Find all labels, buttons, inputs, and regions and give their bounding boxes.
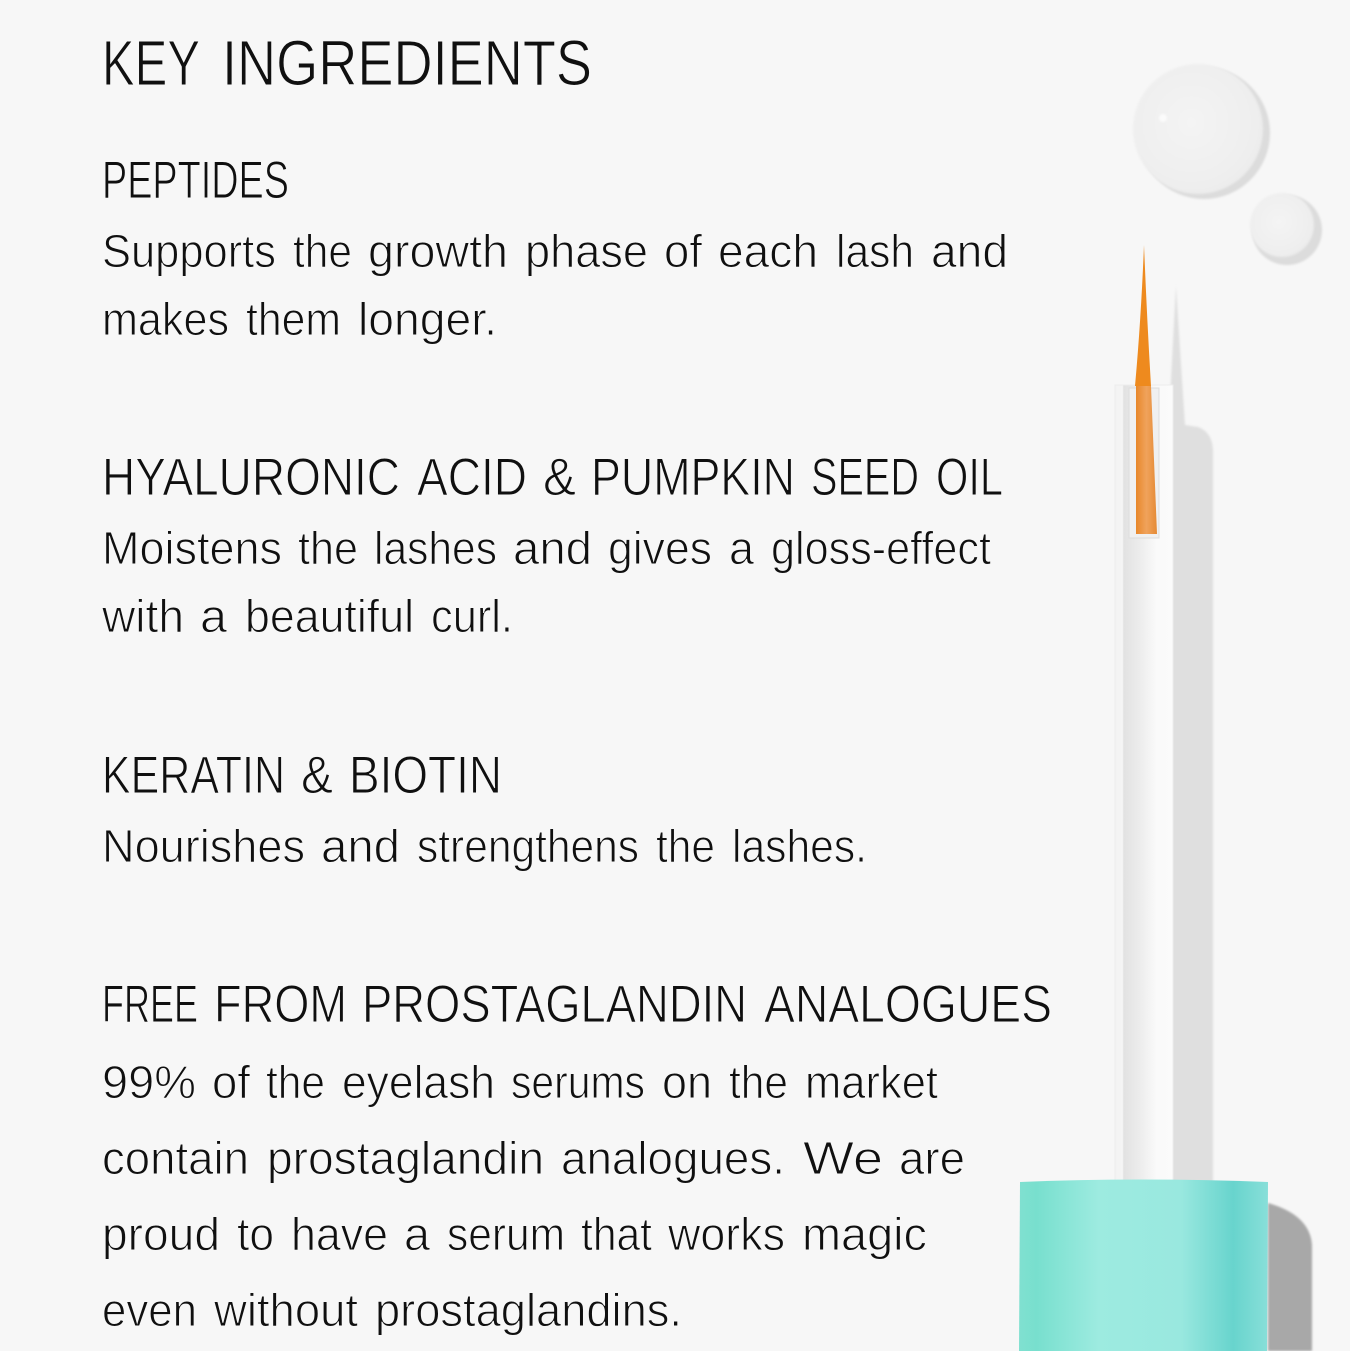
section: free from prostaglandin analogues: are xyxy=(899,1132,965,1184)
section: free from prostaglandin analogues xyxy=(102,975,1052,1336)
section: hyaluronic acid and pumpkin seed oil xyxy=(101,448,1003,642)
section: peptides: lash xyxy=(836,225,914,277)
section: keratin and biotin: & xyxy=(301,746,333,805)
title xyxy=(102,27,592,99)
section: peptides: and xyxy=(931,225,1008,277)
section: free from prostaglandin analogues: proud xyxy=(102,1208,220,1260)
section: peptides: them xyxy=(246,293,341,345)
section: peptides: longer. xyxy=(358,293,497,345)
section: free from prostaglandin analogues: to xyxy=(237,1208,274,1260)
section: free from prostaglandin analogues: prostaglandin xyxy=(267,1132,544,1184)
section: free from prostaglandin analogues: magic xyxy=(802,1208,927,1260)
section: hyaluronic acid and pumpkin seed oil: lashes xyxy=(374,522,497,574)
section: keratin and biotin: lashes. xyxy=(732,820,867,872)
icon: large serum droplet xyxy=(1133,64,1270,199)
icon: small serum droplet xyxy=(1250,193,1322,265)
section: hyaluronic acid and pumpkin seed oil: HYALURONIC xyxy=(102,448,400,507)
section: free from prostaglandin analogues: a xyxy=(404,1208,430,1260)
section: free from prostaglandin analogues: serum xyxy=(447,1208,565,1260)
section: hyaluronic acid and pumpkin seed oil: Moistens xyxy=(102,522,282,574)
section: free from prostaglandin analogues: on xyxy=(662,1056,712,1108)
section: free from prostaglandin analogues: contain xyxy=(102,1132,249,1184)
section: hyaluronic acid and pumpkin seed oil: & xyxy=(543,448,576,507)
section: free from prostaglandin analogues: FREE xyxy=(102,975,198,1034)
section: peptides: phase xyxy=(525,225,648,277)
text block: ingredients xyxy=(101,27,1052,1336)
section: peptides: makes xyxy=(102,293,229,345)
section: hyaluronic acid and pumpkin seed oil: OIL xyxy=(936,448,1003,507)
section: free from prostaglandin analogues: works xyxy=(667,1208,785,1260)
cap shadow xyxy=(1268,1203,1312,1351)
section: free from prostaglandin analogues: eyelash xyxy=(342,1056,495,1108)
wand tube xyxy=(1115,385,1173,1182)
product: applicator wand xyxy=(1115,245,1213,1182)
section: free from prostaglandin analogues: of xyxy=(212,1056,250,1108)
section: peptides: of xyxy=(664,225,702,277)
section: free from prostaglandin analogues: analogues. xyxy=(561,1132,785,1184)
section: hyaluronic acid and pumpkin seed oil: a xyxy=(200,590,227,642)
section: free from prostaglandin analogues: FROM xyxy=(214,975,347,1034)
section: peptides: the xyxy=(293,225,352,277)
section: free from prostaglandin analogues: the xyxy=(729,1056,788,1108)
section: hyaluronic acid and pumpkin seed oil: PUMPKIN xyxy=(591,448,795,507)
section: hyaluronic acid and pumpkin seed oil: a xyxy=(729,522,754,574)
section: keratin and biotin: BIOTIN xyxy=(349,746,502,805)
title: INGREDIENTS xyxy=(222,27,592,99)
title: KEY xyxy=(102,27,200,99)
section: hyaluronic acid and pumpkin seed oil: beautiful xyxy=(245,590,414,642)
section: hyaluronic acid and pumpkin seed oil: and xyxy=(513,522,592,574)
section: free from prostaglandin analogues: market xyxy=(805,1056,938,1108)
product: teal cap xyxy=(1019,1180,1312,1351)
section: free from prostaglandin analogues: without xyxy=(213,1284,358,1336)
section: hyaluronic acid and pumpkin seed oil: the xyxy=(298,522,358,574)
section: keratin and biotin: Nourishes xyxy=(102,820,305,872)
section: peptides: PEPTIDES xyxy=(102,151,289,210)
section: free from prostaglandin analogues: prostaglandins. xyxy=(375,1284,682,1336)
section: peptides xyxy=(102,151,1008,345)
section: free from prostaglandin analogues: have xyxy=(291,1208,388,1260)
section: hyaluronic acid and pumpkin seed oil: ACID xyxy=(417,448,527,507)
section: hyaluronic acid and pumpkin seed oil: with xyxy=(101,590,184,642)
section: peptides: growth xyxy=(368,225,508,277)
section: keratin and biotin: and xyxy=(321,820,400,872)
brush inside sleeve xyxy=(1136,386,1157,534)
section: free from prostaglandin analogues: that xyxy=(581,1208,652,1260)
section: keratin and biotin: the xyxy=(656,820,715,872)
section: hyaluronic acid and pumpkin seed oil: curl. xyxy=(431,590,513,642)
section: free from prostaglandin analogues: We xyxy=(803,1132,883,1184)
wand shadow xyxy=(1170,286,1213,1182)
brush tip xyxy=(1135,245,1151,386)
inner sleeve xyxy=(1129,388,1159,538)
section: keratin and biotin: KERATIN xyxy=(102,746,285,805)
section: hyaluronic acid and pumpkin seed oil: SEED xyxy=(811,448,919,507)
section: free from prostaglandin analogues: PROSTAGLANDIN xyxy=(362,975,747,1034)
section: hyaluronic acid and pumpkin seed oil: gloss-effect xyxy=(771,522,991,574)
section: free from prostaglandin analogues: the xyxy=(266,1056,325,1108)
section: keratin and biotin: strengthens xyxy=(417,820,639,872)
section: free from prostaglandin analogues: 99% xyxy=(102,1056,196,1108)
section: peptides: Supports xyxy=(102,225,276,277)
section: hyaluronic acid and pumpkin seed oil: gives xyxy=(608,522,712,574)
section: free from prostaglandin analogues: even xyxy=(102,1284,197,1336)
cap body xyxy=(1019,1180,1268,1351)
section: peptides: each xyxy=(718,225,818,277)
section: free from prostaglandin analogues: serums xyxy=(511,1056,645,1108)
section: keratin and biotin xyxy=(102,746,867,872)
section: free from prostaglandin analogues: ANALOGUES xyxy=(764,975,1052,1034)
